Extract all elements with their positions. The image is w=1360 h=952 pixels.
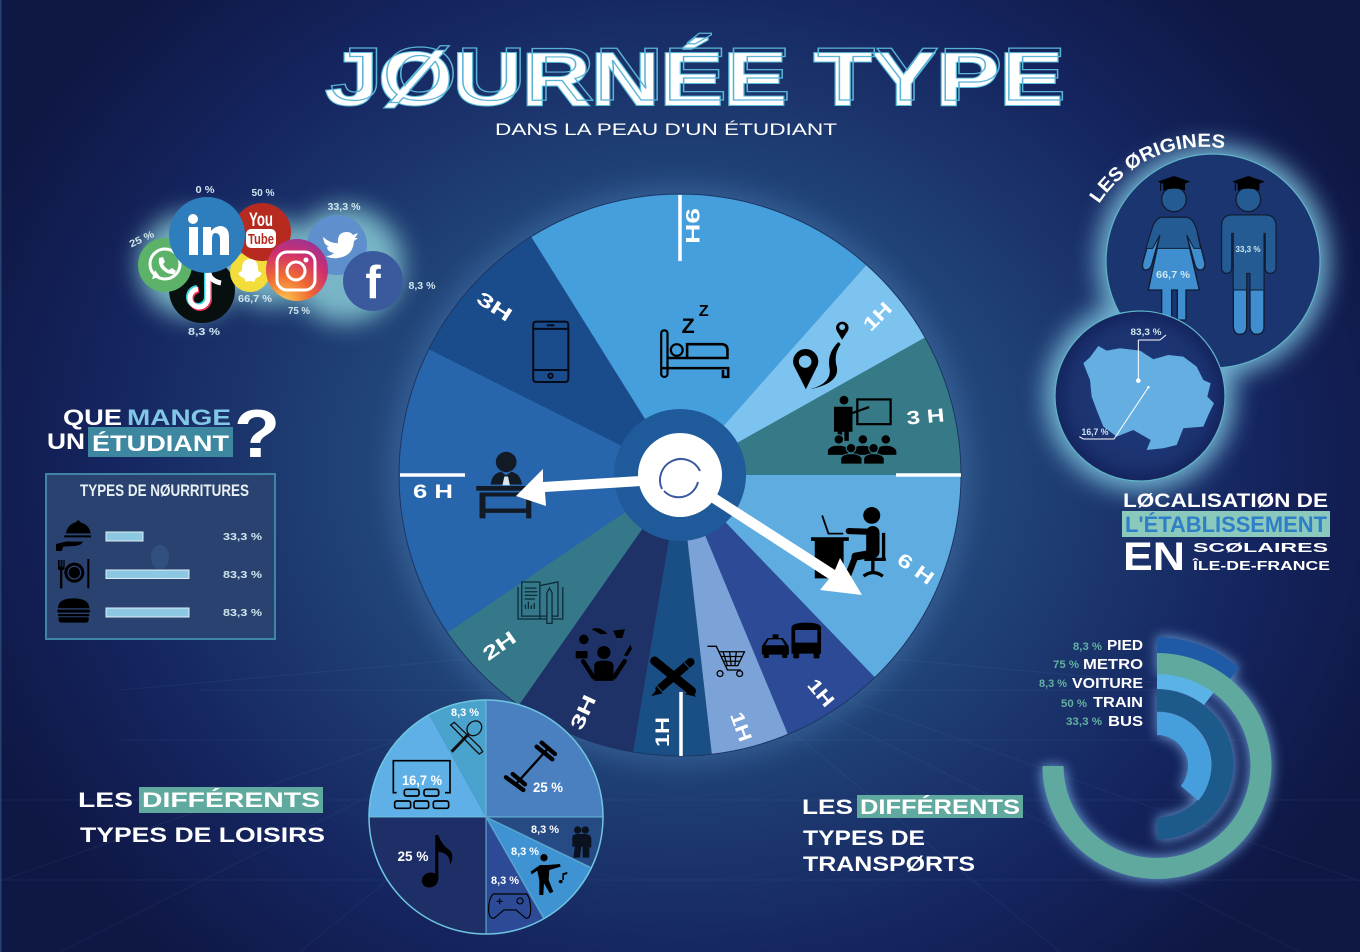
wheel hour labels: 3 H xyxy=(906,405,945,430)
social percentages: 8,3 % xyxy=(408,281,436,292)
pie percentages: 8,3 % xyxy=(491,875,519,887)
social percentages: 8,3 % xyxy=(188,327,220,338)
wedge: phone 3H xyxy=(429,237,680,475)
slice: games xyxy=(486,817,544,934)
glow xyxy=(138,207,403,323)
wheel hour labels: 6 H xyxy=(413,482,453,503)
icon: barbell xyxy=(506,743,555,790)
heading: que mange un etudiant: ? xyxy=(234,396,280,472)
bar chart: food shares: 33,3 % xyxy=(223,532,262,543)
pie percentages: 8,3 % xyxy=(511,846,539,858)
panel: origins xyxy=(1030,128,1346,507)
wedge: transport 1H xyxy=(680,475,875,734)
wheel rim xyxy=(399,194,961,756)
icon: crossed pencil and brush xyxy=(651,661,696,697)
heading: transports: TYPES DE xyxy=(803,827,925,850)
social percentages: 75 % xyxy=(288,306,310,317)
chart: daily wheel xyxy=(390,185,970,765)
pie percentages: 25 % xyxy=(398,848,429,864)
wheel hour labels: 1H xyxy=(653,717,674,747)
icon: tiktok xyxy=(169,257,235,323)
pie percentages: 8,3 % xyxy=(531,824,559,836)
heading: loisirs: LES xyxy=(78,789,133,812)
social percentages xyxy=(128,185,436,338)
heading: que mange un etudiant: QUE xyxy=(63,405,122,430)
social percentages: 50 % xyxy=(252,188,275,199)
heading: transports: TRANSPØRTS xyxy=(803,853,975,876)
ring: voiture xyxy=(1157,680,1209,698)
icon: bed: Z xyxy=(699,302,709,320)
social percentages: 33,3 % xyxy=(328,202,361,213)
pie outline xyxy=(369,700,603,934)
icon: facebook xyxy=(343,251,403,311)
icon: rolling pin and whisk xyxy=(451,718,485,754)
icon: music note xyxy=(419,835,452,890)
wheel hour labels: 1H xyxy=(859,298,897,336)
heading: loisirs: TYPES DE LOISIRS xyxy=(80,824,325,847)
wedge: leisure 3H xyxy=(519,475,680,752)
icon: open book xyxy=(518,582,563,623)
icon: route pins xyxy=(793,322,849,389)
icon: linkedin xyxy=(169,197,245,273)
wheel hour labels: 1H xyxy=(803,675,838,712)
icon: smartphone xyxy=(533,322,568,382)
icon: taxi and bus xyxy=(762,623,821,658)
wheel glow xyxy=(390,185,970,765)
bar chart: food shares: 83,3 % xyxy=(223,608,262,619)
wedge: study 6H xyxy=(680,475,961,677)
chart: transport rings xyxy=(802,637,1261,876)
transport labels: 33,3 % xyxy=(1066,716,1102,728)
heading: transports: DIFFÉRENTS xyxy=(860,796,1020,819)
ring: train xyxy=(1157,700,1222,828)
slice: music xyxy=(369,817,486,934)
icon: plate and cutlery xyxy=(58,559,89,588)
heading: les origines: LES ØRIGINES xyxy=(1089,134,1224,203)
wheel hour labels: 9H xyxy=(681,208,702,244)
icon: youtube: You xyxy=(249,210,273,231)
heading: localisation: SCØLAIRES xyxy=(1193,540,1329,555)
icon: cinema xyxy=(393,761,450,808)
title: JØURNÉE TYPE xyxy=(330,32,1066,116)
panel heading: TYPES DE NØURRITURES xyxy=(80,481,249,500)
icon: instagram xyxy=(266,239,328,301)
wedge: commute 1H xyxy=(680,265,925,475)
heading: localisation: EN xyxy=(1123,535,1185,579)
heading: que mange un etudiant: ÉTUDIANT xyxy=(92,431,230,456)
ring: metro xyxy=(1053,664,1261,869)
icon: gamepad xyxy=(489,894,531,918)
icon: burger xyxy=(57,598,90,623)
arrow: right hand xyxy=(706,491,862,595)
bar chart: food shares: 83,3 % xyxy=(223,570,262,581)
wheel hour labels: 1H xyxy=(725,709,755,745)
food panel box xyxy=(46,474,275,639)
pie percentages xyxy=(398,707,564,887)
icon: dancer xyxy=(531,854,567,895)
wedge: shopping 1H xyxy=(680,475,788,754)
people figures xyxy=(1142,176,1276,334)
ring: bus xyxy=(1157,724,1200,793)
pie percentages: 8,3 % xyxy=(451,707,479,719)
transport labels: 8,3 % xyxy=(1039,678,1067,690)
map percentages xyxy=(1082,327,1162,437)
icon: woman graduate xyxy=(1142,176,1205,320)
icon: youtube: Tube xyxy=(248,231,274,248)
map: ile-de-france xyxy=(1079,335,1214,450)
heading: transports xyxy=(802,795,1023,876)
icon: juggling person xyxy=(576,628,632,681)
heading: localisation: LØCALISATIØN DE xyxy=(1123,491,1328,512)
wheel hour labels: 6 H xyxy=(893,549,938,590)
transport labels: 50 % xyxy=(1061,698,1087,710)
icon: teacher and class xyxy=(827,396,897,464)
icon: cloche xyxy=(56,520,91,551)
icon: snapchat xyxy=(230,252,270,292)
pie percentages: 25 % xyxy=(533,779,564,795)
map percentages: 83,3 % xyxy=(1130,327,1162,337)
ring glow xyxy=(1053,645,1261,869)
transport labels: BUS xyxy=(1108,713,1143,730)
icon: bed xyxy=(661,302,728,377)
chart: leisure pie xyxy=(369,700,603,934)
wheel hour labels: 3H xyxy=(472,288,516,327)
icon: friends xyxy=(572,826,591,858)
wedge: homework 2H xyxy=(447,475,680,705)
gender circle xyxy=(1106,154,1320,368)
heading: que mange un etudiant xyxy=(47,396,280,472)
glow xyxy=(1045,145,1329,491)
wheel hour labels: 2H xyxy=(479,628,521,665)
wedge: lessons 3H xyxy=(680,338,961,475)
icon: man graduate xyxy=(1222,176,1276,334)
subtitle: DANS LA PEAU D'UN ÉTUDIANT xyxy=(495,120,837,139)
icon: twitter xyxy=(307,215,367,275)
transport labels: VOITURE xyxy=(1072,675,1143,692)
title: JØURNÉE TYPE xyxy=(325,37,1063,121)
icon: shopping cart xyxy=(707,646,744,676)
arrow: left hand xyxy=(516,469,641,506)
clock tick marks xyxy=(400,195,961,756)
icon: bed: Z xyxy=(682,314,695,338)
icon: person at desk xyxy=(476,452,531,518)
transport labels: TRAIN xyxy=(1093,694,1143,711)
social percentages: 25 % xyxy=(128,229,156,250)
bar chart: food shares xyxy=(106,532,262,619)
icon: youtube xyxy=(233,203,291,261)
heading: loisirs xyxy=(78,787,325,847)
transport labels: 75 % xyxy=(1053,659,1079,671)
panel: social networks xyxy=(128,185,436,338)
wedge: creative 1H xyxy=(633,475,712,756)
slice: cooking xyxy=(429,700,486,817)
wheel activity icons xyxy=(476,302,897,697)
heading: localisation xyxy=(1122,491,1330,579)
gender percentages: 66,7 % xyxy=(1156,270,1190,281)
transport labels: METRO xyxy=(1083,656,1143,673)
heading: que mange un etudiant: UN xyxy=(47,429,85,454)
heading: transports: LES xyxy=(802,796,853,819)
wheel hour labels xyxy=(413,208,945,747)
panel: food xyxy=(46,396,280,639)
gender percentages xyxy=(1156,245,1260,281)
social percentages: 66,7 % xyxy=(238,294,272,305)
map percentages: 16,7 % xyxy=(1082,427,1108,437)
pie percentages: 16,7 % xyxy=(402,772,442,788)
pie icons xyxy=(393,718,591,918)
icon: facebook: f xyxy=(365,256,381,308)
ring: pied xyxy=(1157,645,1234,674)
wedge: sleep 9H xyxy=(531,194,867,475)
transport labels xyxy=(1039,637,1143,730)
slice: sport xyxy=(486,700,603,817)
transport labels: PIED xyxy=(1107,637,1143,654)
wheel hub xyxy=(516,409,862,595)
heading: localisation: ÎLE-DE-FRANCE xyxy=(1192,558,1330,573)
heading: loisirs: DIFFÉRENTS xyxy=(142,789,320,812)
icon: whatsapp xyxy=(138,238,192,292)
slice: cinema xyxy=(369,715,486,817)
heading: que mange un etudiant: MANGE xyxy=(127,405,231,430)
social percentages: 0 % xyxy=(196,185,215,196)
wedge: work 6H xyxy=(399,349,680,633)
wheel hour labels: 3H xyxy=(567,692,601,733)
heading: localisation: L'ÉTABLISSEMENT xyxy=(1125,512,1328,537)
slice: friends xyxy=(486,817,603,868)
transport labels: 8,3 % xyxy=(1073,641,1102,653)
gender percentages: 33,3 % xyxy=(1236,245,1260,254)
icon: student at laptop xyxy=(811,507,886,578)
map circle xyxy=(1055,311,1225,481)
slice: dance xyxy=(486,817,591,919)
